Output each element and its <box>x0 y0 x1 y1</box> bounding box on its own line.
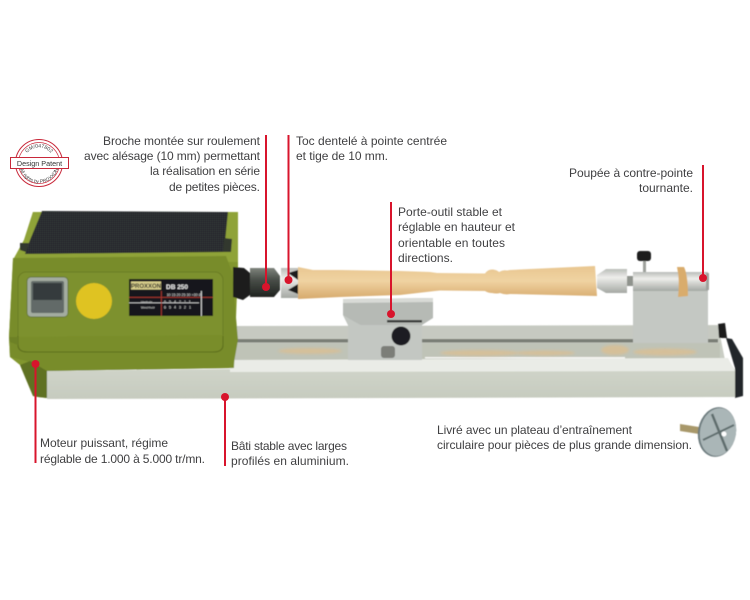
tailstock <box>597 251 709 343</box>
callout: tailstock: Poupée à contre-pointe <box>569 166 693 180</box>
design patent stamp: All rights by PROXXON <box>20 169 58 184</box>
callout: tool rest <box>387 202 516 318</box>
callout: tool rest: directions. <box>398 251 453 265</box>
callout: faceplate: Livré avec un plateau d’entraînement <box>437 423 633 437</box>
callout: tailstock <box>569 165 707 282</box>
callout: spindle: de petites pièces. <box>169 180 260 194</box>
control label <box>129 279 213 316</box>
design patent stamp <box>10 139 69 187</box>
lathe product illustration <box>9 211 743 399</box>
callout: spindle <box>84 134 270 291</box>
callout: drive centre: et tige de 10 mm. <box>296 149 388 163</box>
callout: faceplate: circulaire pour pièces de plus grande dimension. <box>437 438 692 452</box>
callout: drive centre: Toc dentelé à pointe centrée <box>296 134 447 148</box>
sawdust <box>278 345 697 356</box>
callout: tailstock: tournante. <box>639 181 693 195</box>
control label: PROXXON <box>131 284 161 290</box>
callout: drive centre <box>284 134 447 284</box>
callout: bed: profilés en aluminium. <box>231 454 349 468</box>
rubber mat <box>25 211 228 254</box>
control label: 654211 <box>164 300 194 304</box>
aluminium bed <box>47 323 743 399</box>
control label: 10 15 20 25 30 >30 Ø <box>167 293 202 297</box>
callout: tool rest: réglable en hauteur et <box>398 220 516 234</box>
callout: bed <box>221 393 349 468</box>
design patent stamp: GM/047802 <box>25 144 53 153</box>
callout: tool rest: Porte-outil stable et <box>398 205 503 219</box>
control label: 654321 <box>164 306 194 310</box>
callout: spindle: la réalisation en série <box>150 164 260 178</box>
faceplate accessory <box>680 404 740 460</box>
toothed drive centre <box>281 268 299 298</box>
power switch window <box>27 277 68 317</box>
motor housing <box>9 211 238 398</box>
control label: Weichholz <box>141 306 155 310</box>
turned wood workpiece <box>298 266 597 299</box>
yellow speed knob <box>76 283 112 319</box>
callout: bed: Bâti stable avec larges <box>231 439 347 453</box>
callout: spindle: avec alésage (10 mm) permettant <box>84 149 261 163</box>
callout: motor <box>32 360 205 466</box>
callout: motor: réglable de 1.000 à 5.000 tr/mn. <box>40 452 205 466</box>
tool rest <box>343 298 433 360</box>
headstock spindle and chuck <box>233 267 280 300</box>
design patent stamp: Design Patent <box>17 159 62 168</box>
control label: DB 250 <box>166 284 188 291</box>
control label: Hartholz <box>141 300 153 304</box>
callout: tool rest: orientable en toutes <box>398 236 505 250</box>
callout: motor: Moteur puissant, régime <box>40 436 168 450</box>
callout: spindle: Broche montée sur roulement <box>103 134 261 148</box>
callout: faceplate <box>437 423 692 452</box>
